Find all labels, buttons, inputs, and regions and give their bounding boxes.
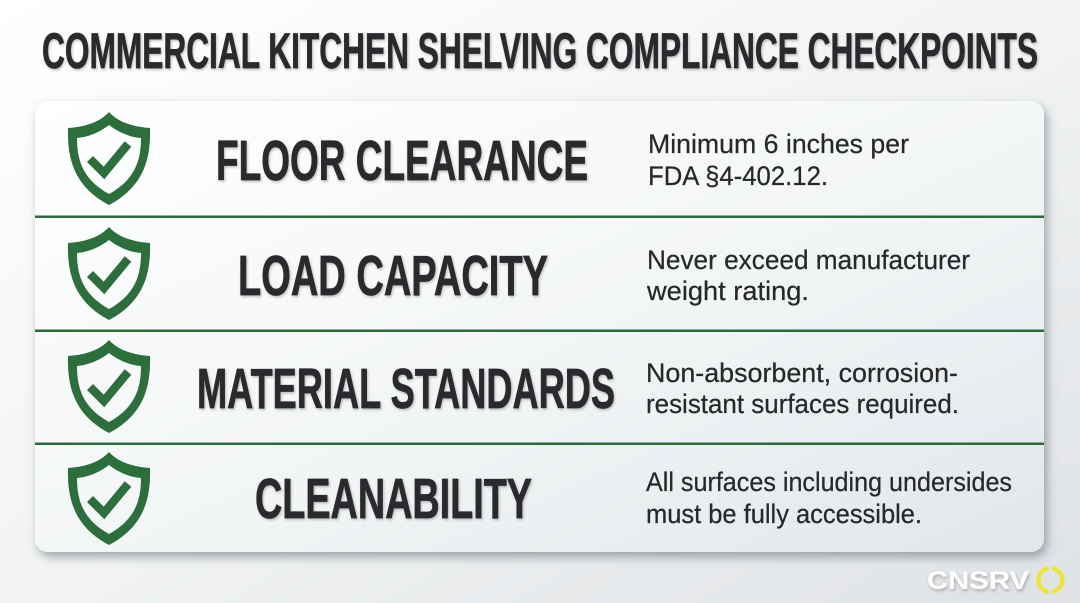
- description: Never exceed manufacturer: [647, 245, 970, 275]
- row: material standards: resistant surfaces required.: [646, 389, 959, 419]
- icon: yellow ring: [1039, 568, 1062, 592]
- row dividers: [35, 216, 1044, 445]
- panel: checklist card: [35, 101, 1044, 552]
- description: All surfaces including undersides: [646, 467, 1012, 497]
- heading: LOAD CAPACITY: [238, 244, 548, 308]
- icon: shield check: [68, 112, 150, 205]
- icon: shield check: [68, 340, 150, 433]
- logo: CNSRV: CNSRV: [927, 567, 1029, 595]
- description: Minimum 6 inches per: [648, 129, 909, 159]
- description: Non-absorbent, corrosion-: [646, 358, 958, 388]
- row: load capacity: weight rating.: [646, 276, 809, 306]
- icon: shield check: [68, 227, 150, 320]
- heading: CLEANABILITY: [255, 467, 532, 531]
- row: material standards: [68, 340, 959, 433]
- row: cleanability: must be fully accessible.: [646, 499, 922, 529]
- logo: CNSRV: [927, 567, 1062, 595]
- row: cleanability: [68, 452, 1012, 545]
- heading: FLOOR CLEARANCE: [216, 129, 588, 193]
- heading: MATERIAL STANDARDS: [197, 357, 615, 421]
- row: load capacity: [68, 227, 970, 320]
- row: floor clearance: [68, 112, 909, 205]
- icon: shield check: [68, 452, 150, 545]
- row: floor clearance: FDA §4-402.12.: [648, 161, 828, 191]
